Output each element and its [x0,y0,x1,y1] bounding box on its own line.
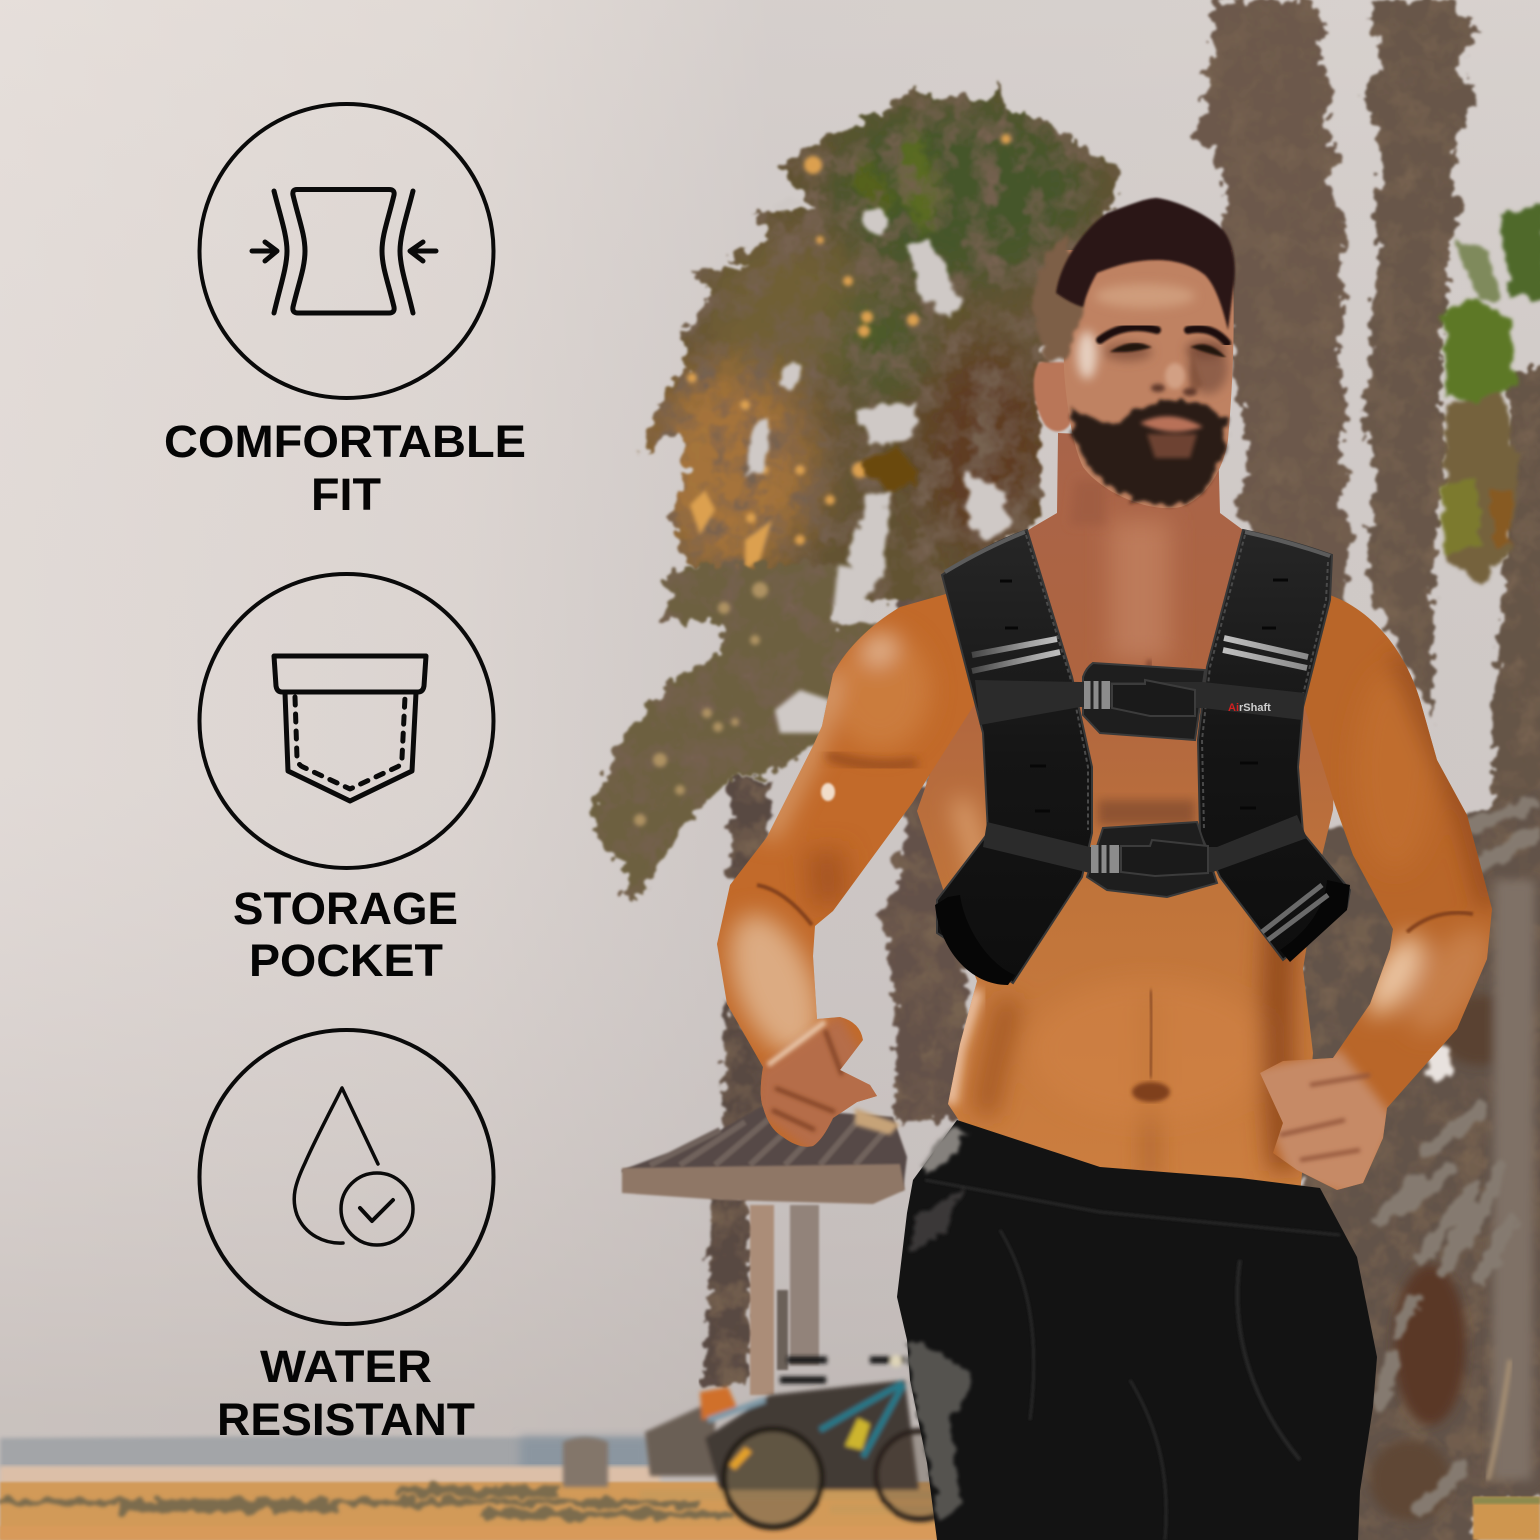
man: shorts waistband and folds [925,1180,1340,1540]
man: shorts [897,1120,1377,1540]
label: comfortable fit: FIT [311,469,381,520]
vest: brand logo: AirShaft [1228,702,1271,714]
background: right palm trunk at edge [1490,360,1540,815]
gazebo: eave [622,1164,905,1204]
icon: stitched pocket [200,574,494,868]
gazebo: sunlit roof patch [855,1108,900,1135]
man: right arm [1260,596,1492,1190]
man: lips and chin patch [1140,416,1203,458]
label: water resistant: RESISTANT [217,1394,475,1445]
background: right palm crown [1440,205,1540,585]
background: dense foliage lower right [1300,785,1540,1540]
product: weighted vest [935,530,1350,985]
background: lower palm crown [590,565,878,903]
vest: top shoulder highlights [945,532,1330,572]
gazebo: posts [750,1205,819,1395]
background: tall palm trunk, left [1192,0,1353,620]
vest: lower chest pad [1087,822,1217,897]
background: dark leaf in palm crown [860,445,920,490]
man: beard and moustache [1072,401,1228,505]
man: neck and torso [917,433,1334,1186]
gazebo: roof [622,1107,907,1190]
feature: comfortable fit [164,104,526,520]
background: left palm trunk [704,775,770,1385]
background: central palm crown [640,70,1130,610]
man: eyebrows [1100,327,1227,343]
vest: upper buckle [1084,680,1195,716]
background: parked bicycles and bin [563,1355,1000,1527]
man: eyes [1113,344,1223,356]
label: water resistant [217,1341,475,1445]
vest: left reflective stripes [972,639,1060,671]
man: hair side fade [1032,232,1085,362]
man: left arm [717,594,974,1147]
vest: stitched edges [1026,535,1328,830]
background: tan speckles and gaps in lower crown [634,565,872,826]
label: comfortable fit [164,416,526,520]
label: storage pocket: POCKET [249,935,443,986]
feature column [164,104,526,1445]
vest: side pouches [935,880,1350,985]
background: shoreline and sand [0,1436,1000,1540]
label: water resistant: WATER [260,1341,432,1392]
background: central palm trunk [873,490,968,1120]
vest: lower reflective stripes [1262,885,1328,940]
vest: lower buckle [1091,840,1208,876]
vest: right panel [1198,530,1350,960]
man: nose [1151,345,1203,396]
vest: lower strap [983,815,1307,873]
background: tall palm trunk, right [1363,0,1480,720]
background: gazebo [622,1107,907,1395]
label: storage pocket: STORAGE [233,883,458,934]
icon: waist compression [200,104,494,398]
photo: running man [700,198,1509,1540]
man: faded shorts patches [908,1126,972,1525]
vest: upper strap [975,680,1305,725]
label: comfortable fit: COMFORTABLE [164,416,526,467]
man: ear [1034,362,1072,431]
man: head and face [1062,250,1234,508]
background: sky gaps through palm crown [745,199,1010,610]
background: sunlit bokeh in palm crown [687,134,1011,570]
vest: left panel [937,530,1092,983]
man: face shading [1077,284,1228,394]
label: storage pocket [233,883,458,986]
icon: water drop with check [200,1030,494,1324]
vest: pad slits [1000,580,1288,811]
vest: upper chest pad [1083,663,1205,740]
feature: water resistant [200,1030,494,1445]
feature: storage pocket [200,574,494,986]
man: hair [1056,198,1235,330]
vest: right reflective stripes [1223,638,1308,668]
